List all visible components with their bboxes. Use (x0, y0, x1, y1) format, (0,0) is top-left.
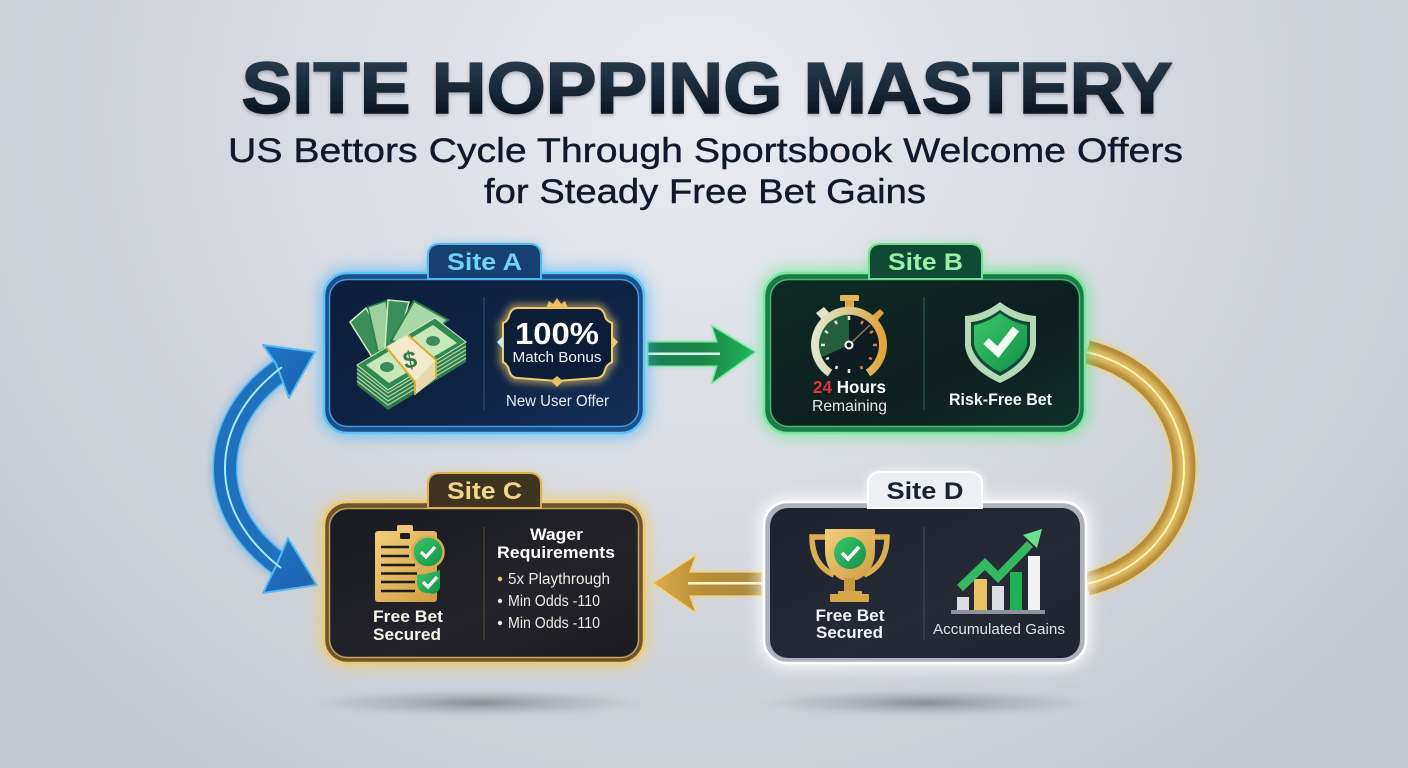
tab: Site D (868, 472, 982, 508)
arrow: gold Site D to Site C (653, 555, 762, 613)
label: free bet secured (816, 606, 885, 642)
subtitle (228, 132, 1183, 211)
label: free bet secured: Free Bet (373, 607, 443, 626)
icon: checklist clipboard (375, 525, 444, 602)
panel: Site A (321, 243, 647, 436)
title: SITE HOPPING MASTERY (242, 49, 1172, 129)
text: wager requirements: Min Odds -110 (508, 593, 600, 610)
text: wager requirements: Min Odds -110 (508, 615, 600, 632)
label: 24 hours remaining: 24 Hours (813, 377, 886, 397)
icon: stack of cash: $ (401, 346, 420, 375)
tab: Site C: Site C (447, 478, 522, 505)
chart: accumulated gains bars and arrow (951, 529, 1045, 614)
label: accumulated gains: Accumulated Gains (933, 621, 1065, 638)
badge: 100% match bonus (497, 298, 618, 387)
label: 24 hours remaining (812, 377, 887, 415)
tab: Site D: Site D (886, 478, 964, 505)
label: free bet secured: Secured (373, 625, 441, 644)
label: risk-free bet: Risk-Free Bet (949, 391, 1052, 409)
text: wager requirements (497, 525, 615, 632)
tab: Site C (428, 473, 541, 508)
text: wager requirements: Wager (530, 525, 583, 544)
icon: stopwatch (815, 295, 884, 377)
tab: Site B (869, 244, 982, 279)
badge: 100% match bonus: Match Bonus (512, 349, 602, 366)
panel: Site B (761, 243, 1088, 436)
panel: Site C (321, 472, 647, 666)
label: 24 hours remaining: Remaining (812, 398, 887, 415)
label: free bet secured: Secured (816, 623, 883, 642)
label: free bet secured (373, 607, 443, 644)
badge: 100% match bonus: 100% (515, 316, 599, 351)
tab: Site A: Site A (447, 249, 522, 276)
label: free bet secured: Free Bet (816, 606, 885, 625)
subtitle: US Bettors Cycle Through Sportsbook Welcome Offers (228, 132, 1183, 170)
floor shadow: right (757, 690, 1093, 716)
text: wager requirements: 5x Playthrough (508, 571, 610, 588)
subtitle: for Steady Free Bet Gains (484, 173, 926, 211)
arrow: gold arc Site B to Site D (1087, 352, 1184, 584)
text: wager requirements: Requirements (497, 543, 615, 562)
arrow: green Site A to Site B (648, 326, 755, 383)
floor shadow: left (311, 690, 647, 716)
panel: Site D (760, 471, 1090, 667)
icon: shield with check (965, 302, 1036, 383)
arrow: blue cycle arc between Site C and Site A (225, 345, 317, 593)
tab: Site A (428, 244, 541, 279)
label: new user offer: New User Offer (506, 393, 609, 410)
icon: trophy (812, 529, 887, 602)
icon: stack of cash (350, 300, 466, 410)
tab: Site B: Site B (888, 249, 963, 276)
